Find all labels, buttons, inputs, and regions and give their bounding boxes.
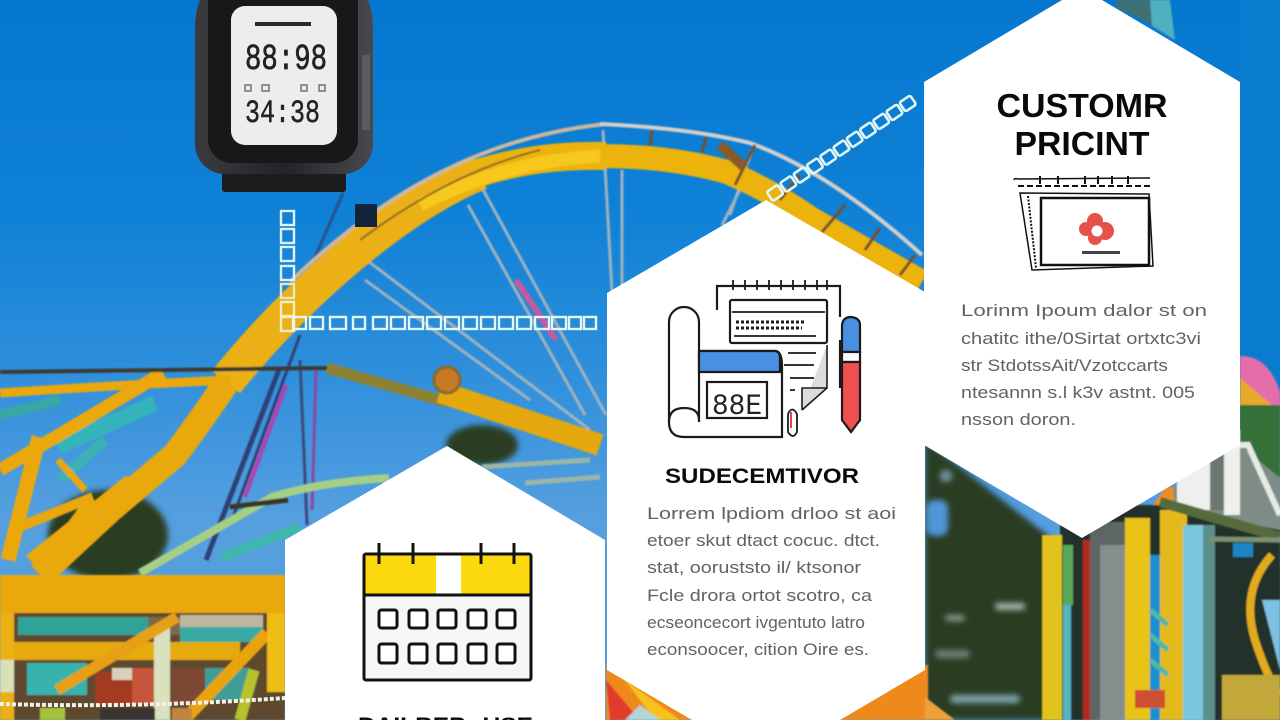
watch second reading: 34:38 [245,95,320,132]
body text: customer pricing: chatitc ithe/0Sirtat ortxtc3vi [961,330,1201,348]
heading: subscription: SUDECEMTIVOR [665,464,860,488]
navy and magenta posts [206,193,556,560]
body text: customer pricing [961,302,1207,429]
body text: customer pricing: Lorinm Ipoum dalor st on [961,302,1207,320]
icon: printed card [1014,176,1153,270]
flower mark [1079,213,1120,254]
body text: subscription: Fcle drora ortot scotro, ca [647,587,873,605]
right columns and ride [1042,356,1280,720]
left structure [0,373,230,573]
watch face [231,6,337,145]
blueprint scroll [669,307,782,437]
icon label: blueprint digits: 88E [712,390,762,424]
body text: subscription: etoer skut dtact cocuc. dtct. [647,532,880,550]
bottom centre tent [606,665,955,720]
body text: subscription: econsoocer, cition Oire es. [647,641,869,659]
body text: customer pricing: nsson doron. [961,411,1076,429]
watch status icons [245,85,325,91]
body text: subscription: stat, ooruststo il/ ktsonor [647,559,862,577]
watch time: 88:98 [245,39,327,80]
mid yellow rail [327,368,447,402]
tree speckles [926,470,1025,703]
top tower [1117,0,1175,40]
icon: calendar [364,543,531,680]
paperclip [788,410,797,436]
body text: subscription: ecseoncecort ivgentuto latro [647,614,865,632]
chain: vertical links [281,211,294,331]
body text: subscription: Lorrem lpdiom drloo st aoi [647,505,896,523]
pale spokes [360,130,752,430]
smartwatch icon [195,0,373,192]
main yellow arc: right limb with ties [600,124,922,255]
chain: horizontal links [293,317,596,329]
horizontal beam [0,575,285,613]
dark block behind arc [355,204,377,227]
heading: customer pricing [996,87,1168,162]
body text: subscription [647,505,896,659]
trees [48,425,1280,720]
upper ride: pink, amber and green [1240,356,1280,412]
main yellow arc: left limb [40,370,235,575]
panel: subscription hexagon [607,200,925,720]
icon: blueprint notebook and pen [669,280,860,437]
bottom left scaffold [0,575,285,720]
sky right of the top hexagon [1240,231,1280,400]
body text: customer pricing: str StdotssAit/Vzotccarts [961,357,1168,375]
ground chain [0,698,285,705]
body text: customer pricing: ntesannn s.l k3v astnt. 005 [961,384,1195,402]
panel: customer pricing hexagon [924,0,1240,538]
pen [842,317,860,352]
pale green and teal tracks [0,400,600,573]
white structure [1172,448,1280,531]
coaster: struts and track [0,124,922,575]
chain: diagonal links [767,95,916,201]
heading: customer pricing: CUSTOMR [996,87,1168,124]
panel: calendar hexagon [285,446,605,720]
heading: customer pricing: PRICINT [1014,125,1150,162]
